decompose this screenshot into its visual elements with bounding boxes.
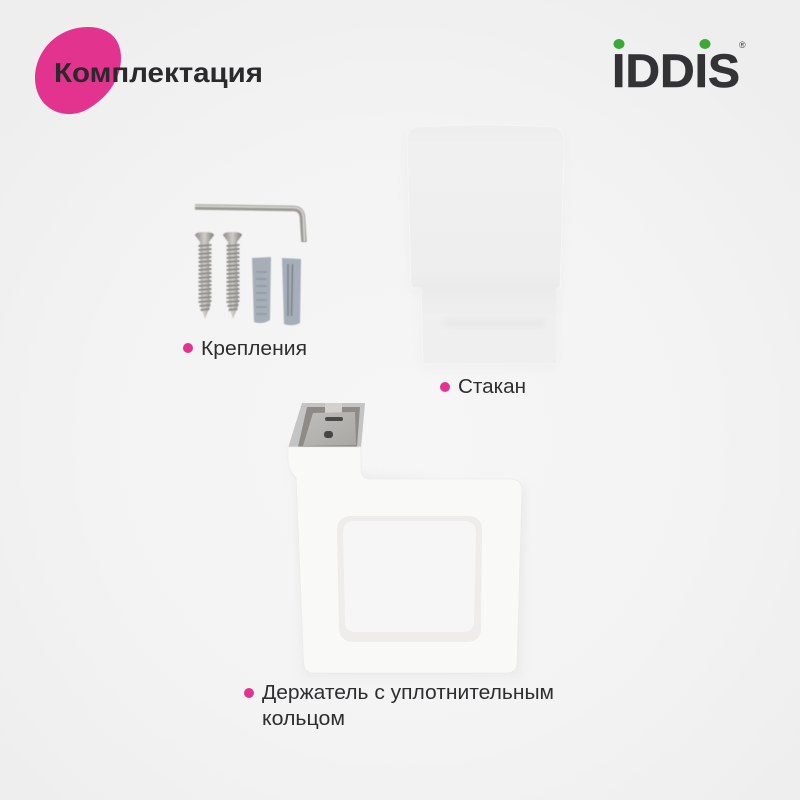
product: fasteners (195, 206, 304, 325)
wall anchor 1 (252, 257, 271, 323)
bullet (440, 382, 450, 392)
mount housing (288, 403, 365, 448)
mount inner cavity (298, 407, 360, 447)
bullet (244, 688, 254, 698)
title text: Комплектация (54, 57, 263, 88)
pink blob (35, 27, 121, 114)
label text: Держатель с уплотнительным (262, 682, 554, 704)
holder body (288, 447, 522, 673)
label text: Стакан (458, 376, 526, 398)
label text: кольцом (262, 708, 345, 730)
bullet (183, 343, 193, 353)
heading: Комплектация with pink blob (35, 27, 263, 114)
ring opening (343, 521, 476, 632)
logo dots (614, 39, 710, 49)
glass inner base (445, 318, 545, 328)
product: frosted glass (406, 125, 566, 368)
product: holder with sealing ring (288, 403, 526, 676)
wall anchor 2 (282, 258, 301, 325)
logo wordmark: IDDIS (612, 44, 740, 97)
holder shadow (288, 447, 526, 676)
label text: Крепления (201, 338, 307, 360)
screw tab (325, 403, 342, 415)
logo: IDDIS (612, 39, 746, 97)
hex key (195, 206, 304, 242)
screw 1 (195, 232, 214, 319)
label: Стакан (440, 376, 526, 398)
screw 2 (223, 232, 242, 319)
registered mark: ® (739, 40, 746, 50)
label: Держатель с уплотнительным кольцом (244, 682, 560, 730)
mounting plate (303, 412, 356, 446)
glass body (407, 125, 564, 364)
glass shadow (406, 135, 566, 368)
sealing ring (337, 516, 482, 642)
label: Крепления (183, 338, 307, 360)
